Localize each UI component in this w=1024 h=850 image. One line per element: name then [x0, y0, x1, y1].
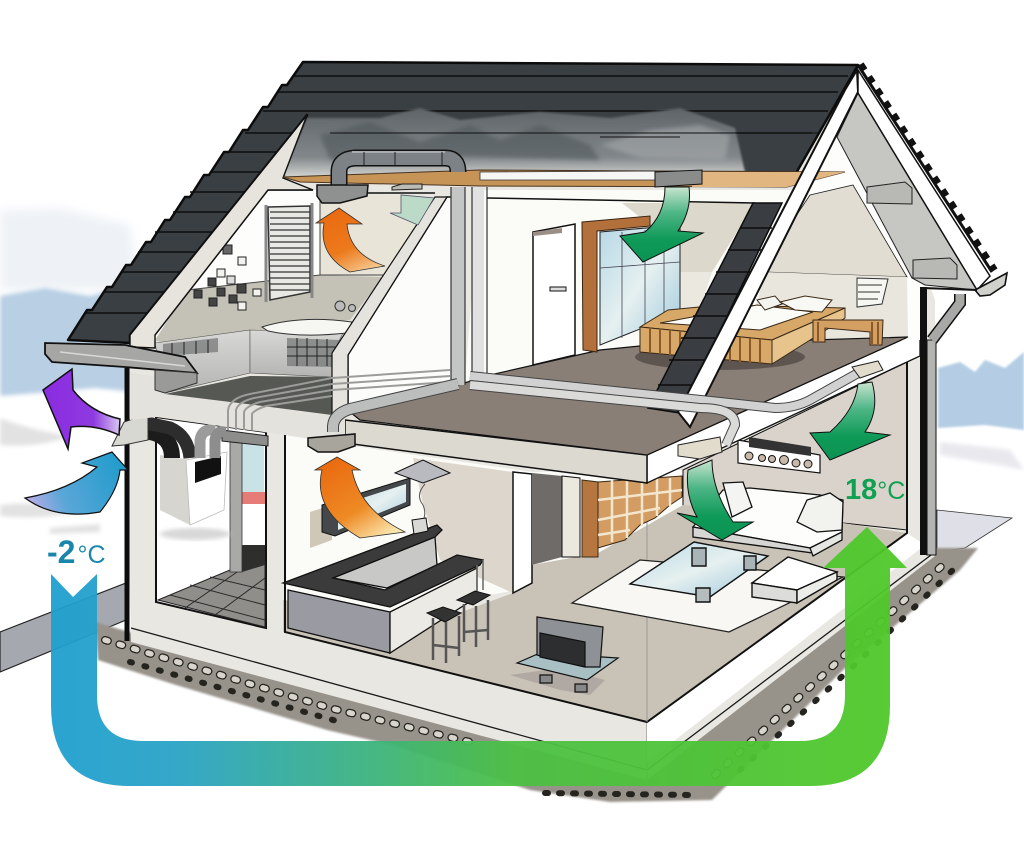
white gable frame right band [858, 70, 990, 290]
temperature label: outside: -2°C [47, 534, 106, 570]
roof right stepped edge [858, 64, 995, 272]
temperature label: inside: 18°C [845, 474, 905, 506]
rug [572, 560, 843, 632]
upper room ceiling line [487, 198, 755, 203]
gable gray soffit [837, 93, 977, 290]
door [533, 224, 575, 365]
gable white wall [690, 93, 977, 420]
white right foundation face [647, 533, 925, 762]
arrow: exhaust purple [43, 369, 120, 449]
supply box attic [655, 170, 702, 187]
kitchen window and hood [310, 460, 450, 548]
bathroom [155, 190, 435, 415]
scenery: snowy mountains left [0, 208, 140, 534]
transparent vertical ducts [451, 187, 487, 385]
arrow: extract orange lower [315, 457, 405, 538]
towel radiator [266, 203, 312, 302]
utility room [156, 417, 268, 628]
partition cut band [332, 197, 447, 415]
wall vent hood [112, 414, 148, 446]
house walls outer shell [125, 90, 935, 780]
sidewalk left [0, 583, 126, 672]
upper right room white wall [465, 190, 908, 455]
floor slab front face [345, 420, 647, 483]
foundation edges [131, 552, 935, 780]
sidewalk right [937, 510, 1012, 552]
bookshelf [582, 476, 682, 557]
supply box ground floor right [852, 361, 883, 378]
left gutter [45, 343, 197, 373]
television [510, 617, 618, 695]
scenery: snowy mountains right [938, 352, 1024, 470]
glass corner line [646, 483, 648, 722]
ventilation unit [160, 452, 230, 540]
gable beige triangle wall [765, 185, 907, 277]
mug [412, 518, 428, 534]
gable dark shingle strip [648, 203, 782, 413]
downpipe [920, 287, 977, 555]
extract vent terminal upper [317, 185, 368, 203]
ottoman [752, 557, 837, 603]
arrow: green supply bedroom [620, 187, 703, 262]
black intake and exhaust ducts [128, 422, 226, 458]
arrow: extract orange upper [316, 208, 385, 272]
decorative wall tile squares [194, 245, 261, 310]
attic duct [339, 152, 458, 186]
transparent riser ducts through wall [228, 370, 450, 430]
supply box ground floor left [678, 437, 722, 459]
bed [635, 296, 883, 370]
roof [68, 62, 858, 343]
shaded kitchen wall [413, 458, 513, 593]
tall window with wood frame [582, 216, 680, 352]
lower duct and bends [333, 372, 860, 445]
room: ground floor back wall [285, 435, 683, 632]
left wall corner line [124, 368, 130, 641]
upper room beige back wall [622, 203, 755, 272]
supply vent terminal pale [392, 184, 422, 190]
room: ground floor floor [283, 505, 907, 722]
white gable frame left band [678, 70, 858, 427]
floor slab right white face [647, 337, 920, 483]
attic smoke haze [283, 108, 820, 178]
sofa [693, 482, 843, 556]
left wall upper band [130, 372, 345, 443]
white column and doorway [513, 472, 580, 593]
arrow: green supply living room left [677, 460, 753, 540]
arrow: heat exchange flow from outside to inside [51, 527, 907, 786]
glass coffee table [630, 542, 768, 602]
small wall radiator [857, 278, 888, 307]
ground floor outline [285, 362, 907, 722]
extract vent terminal lower [308, 434, 355, 452]
gutter bracket [155, 370, 197, 393]
partition wall between rooms [348, 197, 458, 412]
attic wooden board [283, 170, 845, 187]
roof cut face left [130, 115, 313, 348]
upper floor surface [350, 337, 908, 455]
wall sound system [738, 437, 820, 473]
right gutter [975, 273, 1007, 296]
arrow: pale green supply bathroom [390, 195, 434, 225]
kitchen counter [283, 525, 483, 653]
upper room lower wall left of strip [680, 272, 712, 345]
bar stools [427, 591, 490, 663]
bedroom lower wall [745, 272, 908, 345]
arrow: intake blue [25, 452, 128, 514]
room: ground floor right wall [683, 362, 907, 530]
gable beams [867, 182, 957, 279]
gravel strip [95, 548, 978, 802]
arrow: green supply living room right [810, 382, 890, 460]
